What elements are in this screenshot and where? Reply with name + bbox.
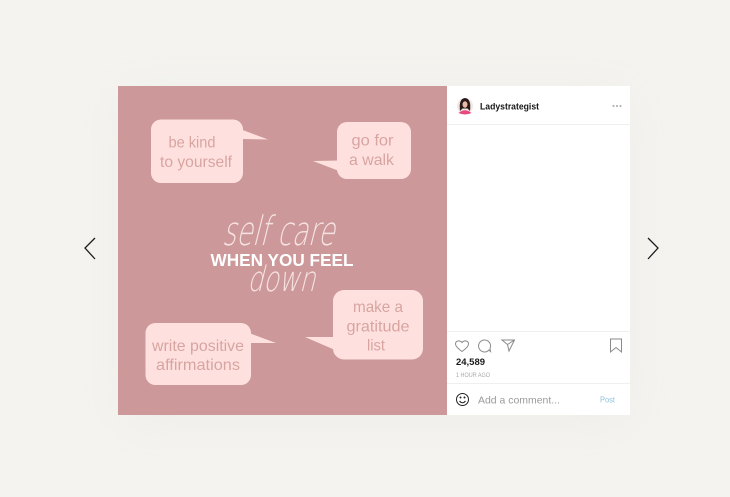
panel: post sidebar bbox=[447, 86, 630, 415]
icon: heart bbox=[456, 341, 468, 352]
speech bubble: make a gratitude list: make a bbox=[353, 299, 403, 316]
speech bubble: make a gratitude list: list bbox=[367, 338, 386, 354]
avatar bbox=[457, 98, 473, 114]
icon: more options bbox=[612, 105, 622, 107]
speech bubble: make a gratitude list bbox=[305, 290, 423, 360]
speech bubble: be kind to yourself: to yourself bbox=[160, 154, 233, 171]
icon: bookmark bbox=[610, 339, 622, 352]
speech bubble: write positive affirmations: write positive bbox=[151, 338, 244, 355]
post button: Post bbox=[600, 396, 616, 404]
arrow: next bbox=[648, 238, 658, 259]
like count: 24,589 bbox=[456, 357, 485, 367]
arrow: previous bbox=[85, 238, 95, 259]
speech bubble: be kind to yourself bbox=[151, 120, 268, 183]
speech bubble: write positive affirmations bbox=[146, 323, 276, 385]
speech bubble: make a gratitude list: gratitude bbox=[346, 318, 410, 336]
username: Ladystrategist bbox=[480, 102, 540, 112]
speech bubble: be kind to yourself: be kind bbox=[168, 134, 216, 152]
title: when you feel: WHEN YOU FEEL bbox=[210, 250, 354, 270]
icon: smiley bbox=[456, 394, 468, 406]
speech bubble: go for a walk: go for bbox=[352, 132, 394, 150]
title script: down: down bbox=[245, 258, 323, 300]
speech bubble: go for a walk bbox=[313, 122, 411, 179]
icon: share bbox=[502, 340, 514, 351]
icon: comment bbox=[479, 340, 491, 352]
timestamp: 1 HOUR AGO bbox=[456, 373, 490, 379]
speech bubble: go for a walk: a walk bbox=[349, 152, 395, 169]
title script: self care: self care bbox=[219, 207, 343, 255]
comment placeholder: Add a comment... bbox=[478, 394, 560, 406]
panel: pink post image bbox=[118, 86, 447, 415]
speech bubble: write positive affirmations: affirmations bbox=[156, 357, 240, 374]
